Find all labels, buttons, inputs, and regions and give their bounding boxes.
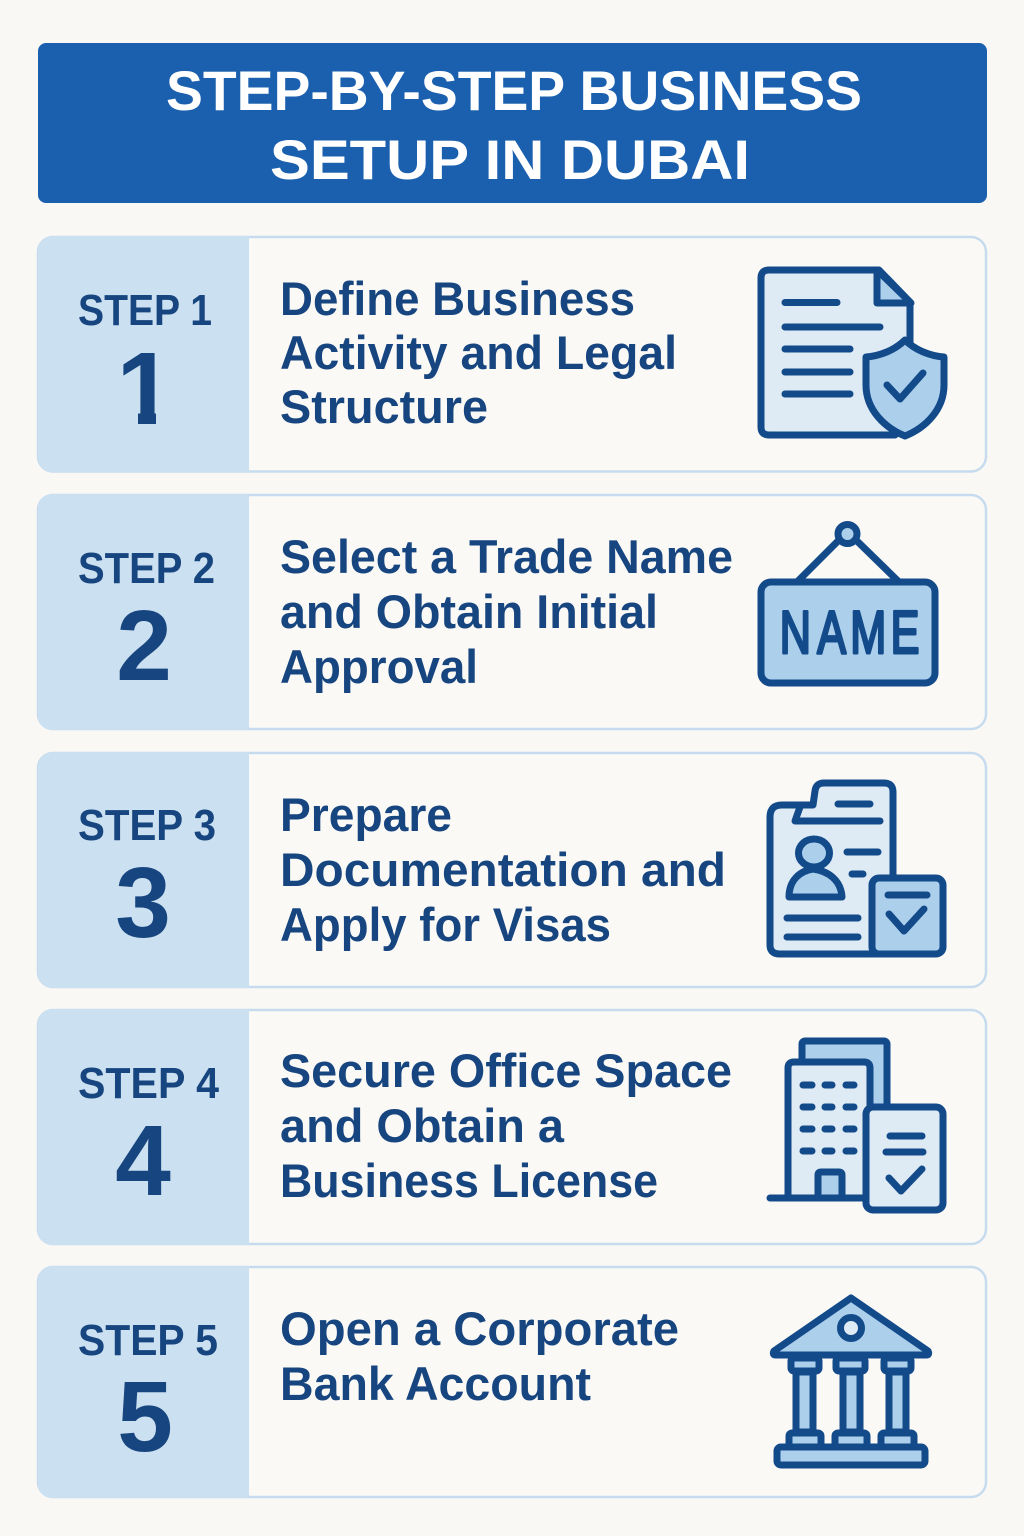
- step 3 description: Apply for Visas: [280, 898, 611, 951]
- step 4 number: 4: [115, 1105, 171, 1217]
- icon: name sign: [761, 524, 935, 683]
- step 1 number: 1: [116, 331, 174, 446]
- icon: visa documents: [770, 783, 943, 954]
- step 4 description: Business License: [280, 1154, 658, 1207]
- panel: step 5: [38, 1266, 986, 1498]
- step 4 label: STEP 4: [78, 1059, 219, 1108]
- step 1 description: Activity and Legal: [280, 326, 677, 379]
- title banner: [38, 43, 987, 203]
- panel: step 4: [38, 1009, 986, 1245]
- step 2 label: STEP 2: [78, 544, 215, 593]
- step 1 label: STEP 1: [78, 286, 212, 335]
- step 2 description: Approval: [280, 640, 478, 693]
- step 2 description: and Obtain Initial: [280, 585, 658, 638]
- step 4 description: and Obtain a: [280, 1099, 565, 1152]
- title text: [166, 59, 862, 191]
- panel: step 1: [38, 236, 986, 472]
- step 2 description: [280, 530, 733, 693]
- step 2 description: Select a Trade Name: [280, 530, 733, 583]
- step 1 description: Structure: [280, 380, 488, 433]
- step 5 number: 5: [117, 1361, 173, 1473]
- step 4 description: Secure Office Space: [280, 1044, 732, 1097]
- title text: STEP-BY-STEP BUSINESS: [166, 59, 862, 122]
- icon: office building and licence: [770, 1041, 943, 1210]
- icon: document with shield: [761, 270, 944, 436]
- icon: name sign: NAME: [780, 600, 919, 667]
- step 2 number: 2: [116, 590, 172, 702]
- step 3 description: [280, 788, 726, 951]
- step 5 label: STEP 5: [78, 1316, 218, 1365]
- icon: bank: [773, 1298, 929, 1465]
- step 3 description: Documentation and: [280, 843, 726, 896]
- step 5 description: [280, 1302, 679, 1410]
- step 5 description: Open a Corporate: [280, 1302, 679, 1355]
- title text: SETUP IN DUBAI: [270, 128, 750, 191]
- step 5 description: Bank Account: [280, 1357, 591, 1410]
- step 3 number: 3: [115, 847, 171, 959]
- panel: step 2: [38, 494, 986, 730]
- step 1 description: Define Business: [280, 272, 635, 325]
- step 3 description: Prepare: [280, 788, 452, 841]
- step 3 label: STEP 3: [78, 801, 216, 850]
- panel: step 3: [38, 752, 986, 988]
- step 4 description: [280, 1044, 732, 1207]
- step 1 description: [280, 272, 677, 433]
